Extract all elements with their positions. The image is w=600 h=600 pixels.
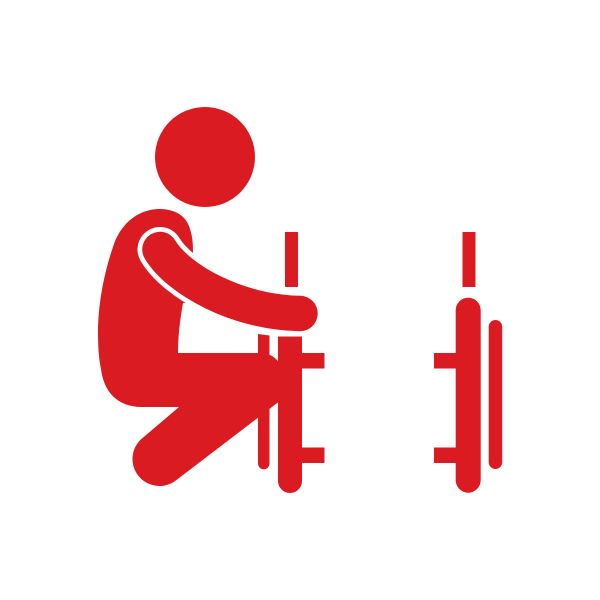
person: lower leg [132, 399, 279, 486]
wheel: upper axle segment [285, 232, 298, 287]
person: arm with white outline [160, 250, 300, 314]
arm fill [160, 250, 300, 314]
icon: spare wheel [434, 232, 502, 493]
arm outline [160, 250, 300, 314]
wheel: upper hub tab [301, 353, 324, 368]
wheel: lower hub tab [434, 448, 457, 463]
person: head [155, 107, 255, 207]
wheel: lower hub tab [301, 448, 324, 463]
wheel: outer thin rail [489, 320, 502, 469]
icon: crouching person with wheel [98, 107, 324, 493]
wheel: upper axle segment [462, 232, 476, 287]
wheel: main tyre bar [278, 336, 302, 493]
person: torso and thigh [98, 209, 279, 407]
wheel: inner thin rail [258, 334, 270, 469]
wheel: main tyre bar [456, 298, 481, 493]
wheel: upper hub tab [434, 353, 457, 368]
